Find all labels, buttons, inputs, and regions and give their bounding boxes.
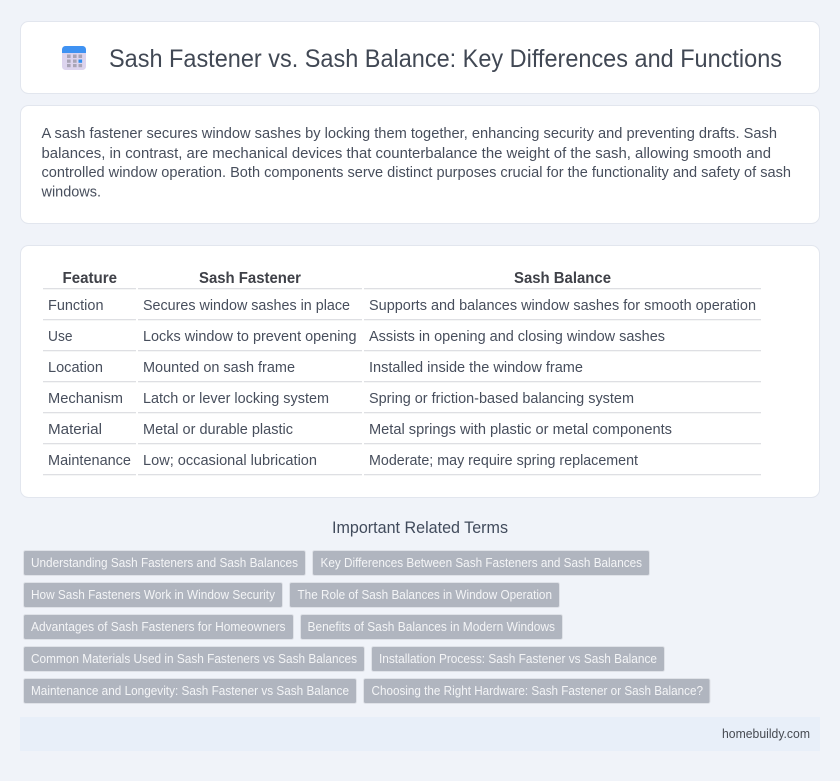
tag: How Sash Fasteners Work in Window Security (31, 588, 276, 602)
row: maintenance: Maintenance (48, 453, 131, 469)
row: use: Use (48, 329, 72, 345)
title: Sash Fastener vs. Sash Balance: Key Differences and Functions (109, 45, 782, 73)
row: mechanism: Latch or lever locking system (143, 391, 329, 407)
tag: Advantages of Sash Fasteners for Homeowners (31, 620, 286, 634)
table header (62, 270, 611, 287)
row: location (48, 360, 583, 376)
tag: The Role of Sash Balances in Window Operation (298, 588, 552, 602)
tag: Understanding Sash Fasteners and Sash Balances (31, 556, 298, 570)
icon: calendar (62, 46, 86, 70)
row: material: Metal springs with plastic or metal components (369, 422, 672, 438)
tag: Installation Process: Sash Fastener vs Sash Balance (379, 652, 657, 666)
tag (300, 614, 562, 640)
table header: Sash Balance (514, 270, 611, 287)
tag: Maintenance and Longevity: Sash Fastener vs Sash Balance (31, 684, 349, 698)
footer source: homebuildy.com (722, 726, 810, 741)
row: function: Supports and balances window sashes for smooth operation (369, 298, 756, 314)
text block: description (41, 125, 791, 200)
row: location: Location (48, 360, 103, 376)
tag (24, 646, 364, 672)
tag (24, 614, 294, 640)
tag (372, 646, 664, 672)
text block: description: controlled window operation. Both components serve distinct purposes crucial for the functionality and safety of sash (42, 164, 791, 181)
tag (24, 550, 306, 576)
row: use: Assists in opening and closing window sashes (369, 329, 665, 345)
row: mechanism: Mechanism (48, 391, 123, 407)
panel: title header (20, 22, 820, 94)
tag: Key Differences Between Sash Fasteners and Sash Balances (320, 556, 642, 570)
row: use: Locks window to prevent opening (143, 329, 356, 345)
row: location: Installed inside the window frame (369, 360, 583, 376)
text block: description: A sash fastener secures window sashes by locking them together, enhancing security and preventing drafts. Sash (42, 125, 777, 142)
panel: comparison table (20, 246, 820, 498)
table rules (43, 288, 761, 475)
table header: Feature (62, 270, 117, 287)
row: mechanism: Spring or friction-based balancing system (369, 391, 634, 407)
row: function: Function (48, 298, 104, 314)
row: mechanism (48, 391, 634, 407)
row: material: Metal or durable plastic (143, 422, 294, 438)
footer (20, 717, 820, 751)
row: use (48, 329, 665, 345)
row: maintenance (48, 453, 638, 469)
tag (312, 550, 650, 576)
tag: Common Materials Used in Sash Fasteners vs Sash Balances (31, 652, 357, 666)
tag (290, 582, 560, 608)
panel: intro text (20, 106, 820, 224)
text block: description: balances, in contrast, are mechanical devices that counterbalance the weight of the sash, allowing smooth and (42, 145, 771, 162)
table header: Sash Fastener (199, 270, 301, 287)
row: material: Material (48, 422, 102, 438)
row: function (48, 298, 756, 314)
row: function: Secures window sashes in place (143, 298, 350, 314)
tag: Choosing the Right Hardware: Sash Fastener or Sash Balance? (372, 684, 703, 698)
tag list: related terms (24, 550, 710, 704)
tag (24, 582, 282, 608)
tag (24, 678, 356, 704)
tag: Benefits of Sash Balances in Modern Windows (308, 620, 555, 634)
row: maintenance: Low; occasional lubrication (143, 453, 317, 469)
heading: related terms: Important Related Terms (332, 519, 508, 537)
text block: description: windows. (41, 184, 101, 200)
row: location: Mounted on sash frame (143, 360, 295, 376)
row: material (48, 422, 672, 438)
row: maintenance: Moderate; may require spring replacement (369, 453, 638, 469)
tag (364, 678, 710, 704)
